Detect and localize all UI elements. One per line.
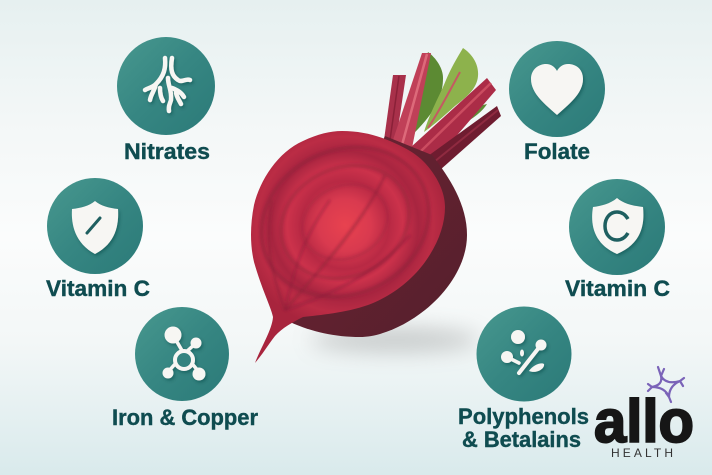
label: & Betalains bbox=[462, 427, 581, 452]
item: Polyphenols & Betalains bbox=[458, 306, 589, 452]
ground shadow bbox=[310, 328, 480, 352]
item: Iron & Copper bbox=[112, 307, 258, 430]
label: Iron & Copper bbox=[112, 405, 258, 430]
label: Folate bbox=[524, 139, 590, 164]
label: Nitrates bbox=[124, 139, 210, 164]
icon: shield with C bbox=[569, 179, 665, 275]
item: Nitrates bbox=[117, 37, 215, 164]
label: Vitamin C bbox=[46, 276, 150, 301]
item: Folate bbox=[509, 41, 605, 164]
logo: allo health bbox=[594, 367, 694, 460]
icon: heart bbox=[509, 41, 605, 137]
label: Vitamin C bbox=[565, 276, 670, 301]
cut face bbox=[251, 131, 445, 363]
icon: molecule bbox=[135, 307, 229, 401]
label bbox=[458, 404, 589, 452]
item: Vitamin C right bbox=[565, 179, 670, 301]
icon: purple star bbox=[648, 367, 684, 402]
leaves bbox=[412, 48, 487, 135]
wordmark: allo bbox=[594, 388, 694, 455]
stems bbox=[384, 53, 501, 170]
wordmark subtitle: HEALTH bbox=[611, 446, 673, 460]
item: Vitamin C left bbox=[46, 178, 150, 301]
label: Polyphenols bbox=[458, 404, 589, 429]
icon: shield with slash bbox=[47, 178, 143, 274]
icon: polyphenol shapes bbox=[476, 306, 572, 402]
flesh rings bbox=[259, 145, 431, 311]
beet body skin bbox=[290, 136, 467, 337]
icon: root branches bbox=[117, 37, 215, 135]
beetroot illustration bbox=[237, 48, 501, 370]
